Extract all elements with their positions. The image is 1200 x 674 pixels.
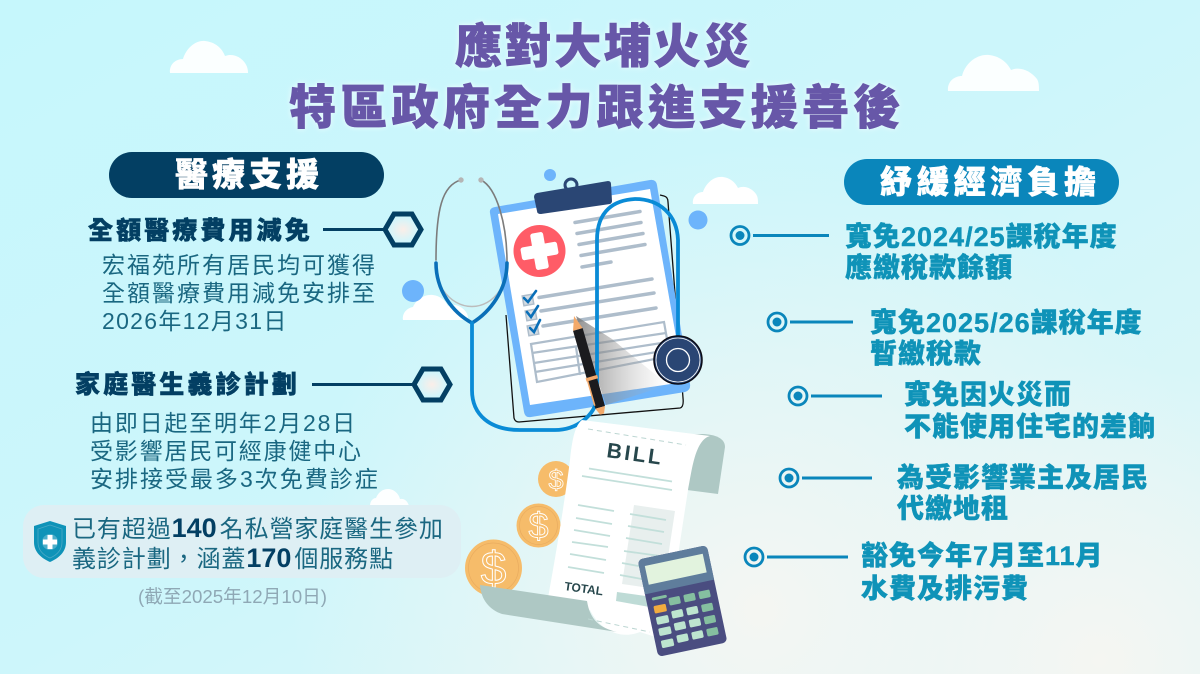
coin: small [538, 461, 574, 497]
item: unusable home waiver [789, 379, 1156, 442]
item: water and sewage: 豁免今年7月至11月 [861, 540, 1104, 571]
cloud: centre right [693, 177, 758, 204]
illustration: clipboard and stethoscope [436, 177, 702, 430]
coin: medium: $ [528, 505, 549, 546]
receipt paper [548, 420, 710, 640]
cloud: centre left [403, 295, 468, 320]
item: family doctor programme: 安排接受最多3次免費診症 [90, 466, 380, 492]
heading pill: medical support [109, 152, 384, 198]
receipt lines [568, 429, 686, 632]
item: unusable home waiver: 寬免因火災而 [904, 379, 1072, 410]
callout: participating doctors: 已有超過140名私營家庭醫生參加 [72, 513, 444, 543]
pen [568, 314, 608, 416]
red cross badge [514, 225, 566, 277]
clip [534, 179, 612, 214]
decorative dot: right [688, 210, 708, 230]
item: full fee waiver: 全額醫療費用減免 [88, 217, 313, 245]
item: water and sewage: 水費及排污費 [861, 574, 1029, 604]
total label: TOTAL [564, 579, 604, 598]
title: 應對大埔火災 [455, 20, 753, 73]
clipboard [490, 180, 690, 417]
item: unusable home waiver: 不能使用住宅的差餉 [904, 411, 1156, 442]
heading pill: medical support: 醫療支援 [175, 156, 323, 193]
bill heading: BILL [605, 439, 665, 470]
cloud: top right [948, 55, 1039, 91]
chest piece [654, 336, 702, 384]
paper [498, 189, 684, 405]
note: data date: (截至2025年12月10日) [138, 586, 327, 607]
right column: easing financial burden [731, 159, 1156, 604]
item: family doctor programme [75, 369, 450, 492]
cloud: top left [170, 41, 248, 73]
item: full fee waiver [88, 214, 421, 334]
decorative dot: left [402, 280, 424, 302]
stethoscope tubing [436, 180, 678, 430]
item: family doctor programme: 家庭醫生義診計劃 [75, 370, 300, 399]
receipt curl top [687, 434, 725, 494]
cloud: above note box [370, 489, 409, 506]
item: 2024/25 tax waiver [731, 221, 1118, 283]
coin: small: $ [548, 465, 564, 495]
coin: large: $ [481, 542, 506, 594]
decorative dot: top [544, 169, 556, 181]
item: full fee waiver: 2026年12月31日 [102, 308, 288, 334]
item: 2025/26 tax waiver [768, 307, 1143, 369]
checkboxes [522, 291, 540, 336]
paper text lines [539, 212, 656, 326]
title [289, 20, 905, 134]
item: full fee waiver: 宏福苑所有居民均可獲得 [102, 252, 377, 278]
item: 2024/25 tax waiver: 應繳稅款餘額 [845, 252, 1013, 283]
item: family doctor programme: 受影響居民可經康健中心 [90, 438, 363, 464]
coin: large [465, 540, 522, 596]
left column: medical support [23, 152, 461, 607]
title: 特區政府全力跟進支援善後 [289, 81, 905, 134]
item: land rent: 代繳地租 [897, 494, 1009, 524]
receipt curl bottom [480, 585, 617, 632]
heading pill: easing financial burden [844, 159, 1119, 205]
item: family doctor programme: 由即日起至明年2月28日 [90, 410, 357, 436]
earpieces [458, 177, 484, 183]
illustration: bill, coins and calculator [465, 420, 727, 657]
callout: participating doctors: 義診計劃，涵蓋170個服務點 [72, 543, 394, 573]
item: water and sewage [745, 540, 1104, 604]
item: 2024/25 tax waiver: 寬免2024/25課稅年度 [845, 221, 1118, 252]
calculator [638, 545, 727, 657]
item: land rent: 為受影響業主及居民 [897, 462, 1149, 493]
coin: medium [516, 504, 560, 548]
icon: shield [34, 521, 66, 562]
pen shadow [576, 316, 668, 405]
heading pill: easing financial burden: 紓緩經濟負擔 [880, 164, 1101, 200]
item: land rent [780, 462, 1149, 524]
callout: participating doctors [23, 505, 461, 578]
clipboard back sheet [506, 195, 683, 422]
item: full fee waiver: 全額醫療費用減免安排至 [102, 280, 377, 306]
item: 2025/26 tax waiver: 寬免2025/26課稅年度 [870, 307, 1143, 338]
form table [531, 322, 670, 382]
item: 2025/26 tax waiver: 暫繳稅款 [870, 339, 982, 369]
